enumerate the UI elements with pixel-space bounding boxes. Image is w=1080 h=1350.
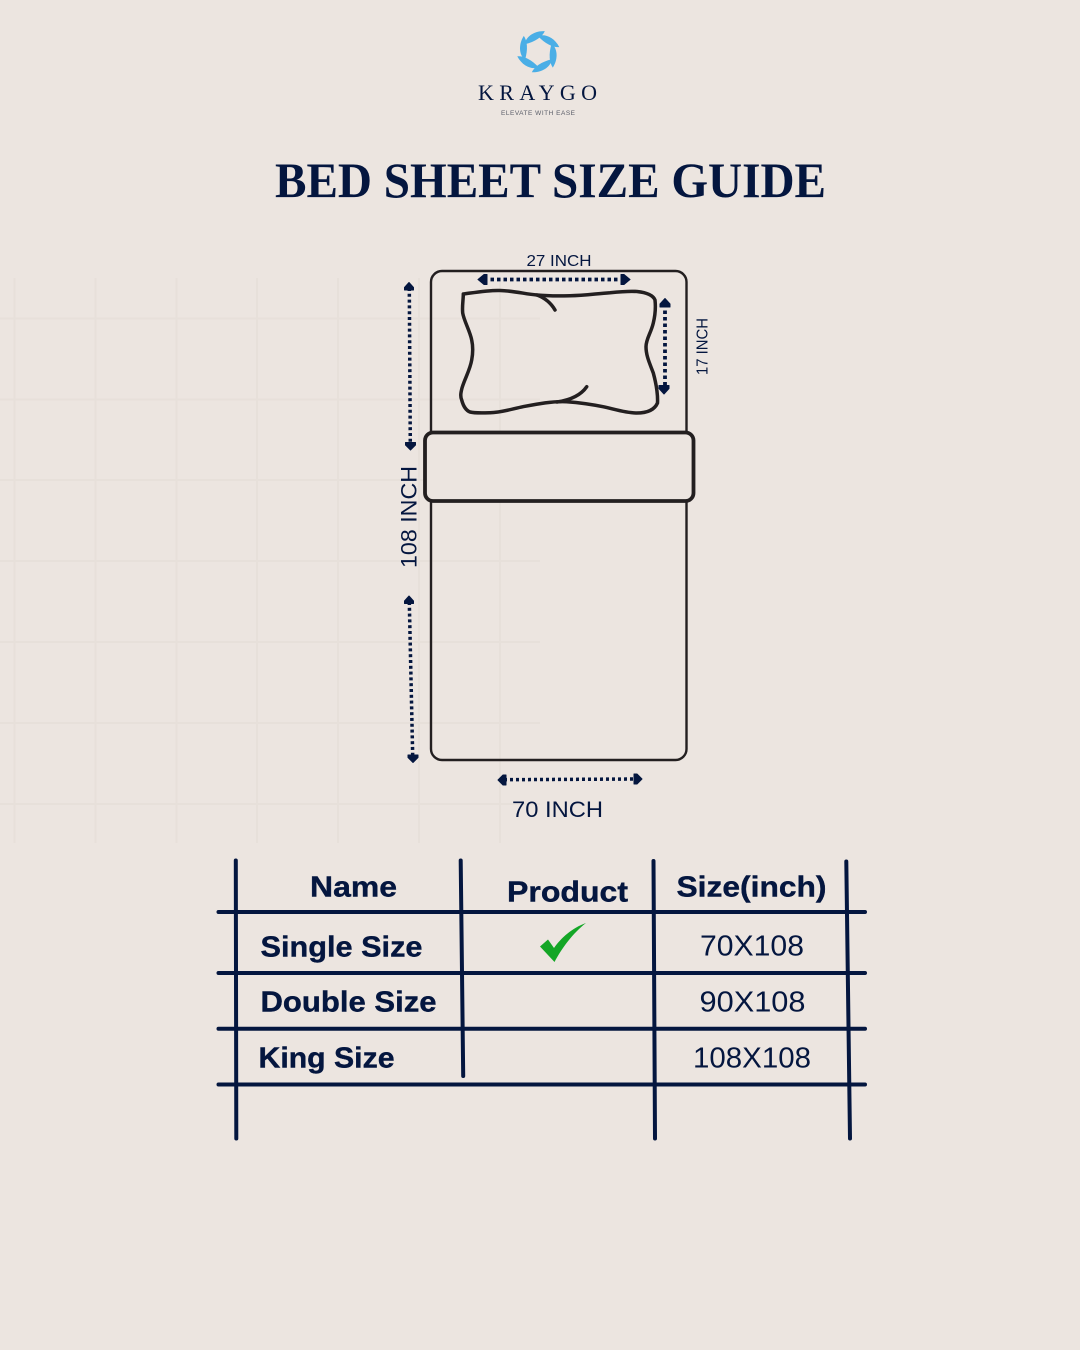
bed diagram bbox=[396, 253, 712, 822]
header: size: Size(inch) bbox=[676, 872, 826, 904]
folded sheet band bbox=[425, 432, 694, 501]
pillow bbox=[461, 290, 658, 413]
icon: green check bbox=[540, 923, 586, 962]
dimension arrow: length lower bbox=[404, 596, 418, 762]
value: 70x108: 70X108 bbox=[700, 930, 804, 962]
label: 27 inch: 27 INCH bbox=[526, 253, 592, 270]
logo tagline: ELEVATE WITH EASE bbox=[501, 110, 576, 117]
dimension arrow: length upper bbox=[404, 282, 416, 450]
bed outline bbox=[431, 271, 686, 760]
label: 108 inch: 108 INCH bbox=[396, 466, 422, 568]
logo wordmark: KRAYGO bbox=[478, 80, 597, 105]
row: double size: Double Size bbox=[260, 986, 436, 1018]
header: product: Product bbox=[507, 876, 628, 908]
dimension arrow: pillow height bbox=[659, 298, 670, 394]
row: king size: King Size bbox=[258, 1042, 394, 1074]
dimension arrow: pillow width bbox=[478, 274, 630, 284]
label: 70 inch: 70 INCH bbox=[512, 797, 603, 822]
header: name: Name bbox=[310, 872, 397, 904]
title: BED SHEET SIZE GUIDE bbox=[275, 152, 826, 208]
icon: logo ring of leaves bbox=[514, 30, 563, 74]
row: single size: Single Size bbox=[260, 932, 422, 964]
label: 17 inch: 17 INCH bbox=[694, 318, 712, 375]
value: 108x108: 108X108 bbox=[693, 1042, 811, 1074]
table grid bbox=[218, 860, 865, 1138]
value: 90x108: 90X108 bbox=[700, 986, 806, 1018]
dimension arrow: bed width bbox=[498, 774, 642, 785]
size table bbox=[218, 860, 865, 1138]
logo bbox=[478, 30, 597, 117]
